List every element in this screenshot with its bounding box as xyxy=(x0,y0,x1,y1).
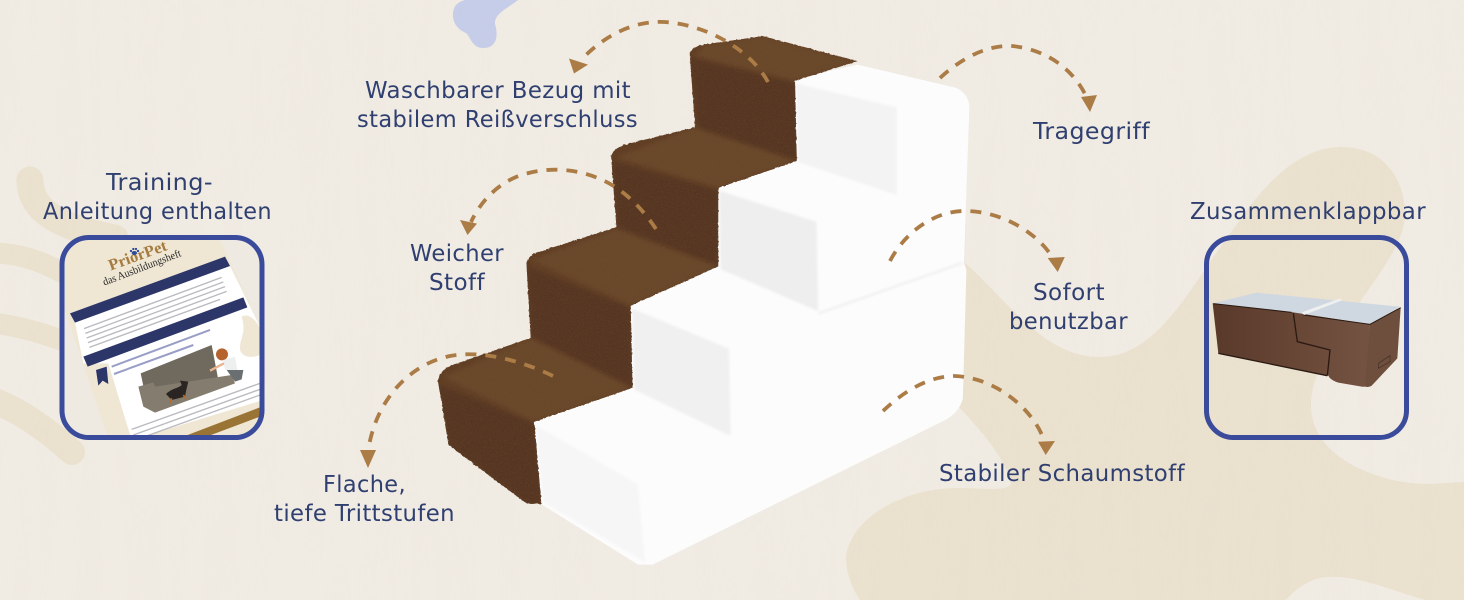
brown plush cover xyxy=(434,31,863,509)
label: Waschbarer Bezug xyxy=(357,78,638,133)
label: Flache Trittstufen: tiefe Trittstufen xyxy=(274,501,455,527)
booklet bands xyxy=(70,257,230,323)
label: Weicher Stoff: Stoff xyxy=(429,270,485,296)
heading: Training-Anleitung xyxy=(43,170,272,225)
booklet illustration: dog xyxy=(166,381,188,403)
arrow: Waschbarer Bezug xyxy=(569,22,768,82)
heading: Training-Anleitung: Training- xyxy=(105,170,213,196)
panel: folded product xyxy=(1206,238,1406,438)
product: pet stairs xyxy=(434,31,968,563)
label: Sofort benutzbar xyxy=(1009,280,1128,335)
heading: Zusammenklappbar: Zusammenklappbar xyxy=(1190,199,1426,225)
folded stairs: side xyxy=(1365,308,1401,387)
label: Sofort benutzbar: benutzbar xyxy=(1009,309,1128,335)
background swooshes: left xyxy=(0,180,115,452)
arrow: Stabiler Schaumstoff xyxy=(883,376,1055,455)
folded stairs: front xyxy=(1213,303,1370,387)
heading: Training-Anleitung: Anleitung enthalten xyxy=(43,199,272,225)
label: Tragegriff: Tragegriff xyxy=(1032,119,1151,145)
booklet title: das Ausbildungsheft xyxy=(101,248,183,288)
label: Flache Trittstufen xyxy=(274,472,455,527)
label: Waschbarer Bezug: stabilem Reißverschluss xyxy=(357,107,638,133)
booklet page xyxy=(65,237,263,443)
label: Waschbarer Bezug: Waschbarer Bezug mit xyxy=(365,78,631,104)
folded stairs: seams xyxy=(1213,304,1401,376)
folded stairs: zipper xyxy=(1302,298,1342,315)
label: Weicher Stoff: Weicher xyxy=(410,241,504,267)
background paw fragment xyxy=(453,0,518,48)
label: Stabiler Schaumstoff: Stabiler Schaumstoff xyxy=(939,461,1185,487)
white foam body xyxy=(534,66,968,563)
foam shaded risers xyxy=(536,84,963,562)
folded frame xyxy=(1206,238,1406,438)
arrow: Sofort benutzbar xyxy=(890,211,1065,272)
booklet paw xyxy=(130,248,139,255)
label: Sofort benutzbar: Sofort xyxy=(1033,280,1105,306)
booklet illustration: person xyxy=(210,348,243,382)
booklet title: PriorPet xyxy=(106,237,170,274)
arrow: Tragegriff xyxy=(940,46,1097,112)
booklet frame xyxy=(62,238,262,438)
background blob: right wave xyxy=(846,147,1464,600)
booklet illustration: sofa xyxy=(138,345,235,413)
arrow: Weicher Stoff xyxy=(460,170,656,235)
folded stairs: top xyxy=(1213,293,1400,324)
label: Flache Trittstufen: Flache, xyxy=(323,472,406,498)
label: Weicher Stoff xyxy=(410,241,504,296)
panel: training booklet xyxy=(60,233,267,443)
booklet text lines xyxy=(84,277,260,438)
arrow: Flache Trittstufen xyxy=(360,354,553,468)
